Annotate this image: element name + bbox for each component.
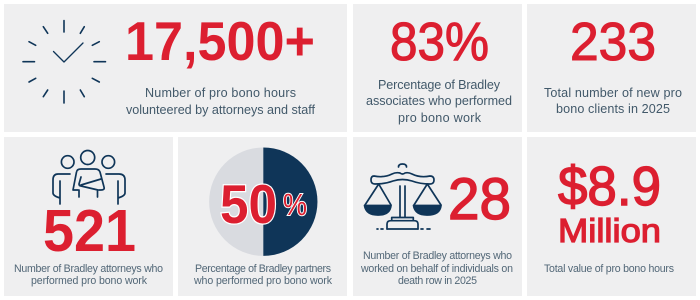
panel: new clients	[527, 4, 696, 132]
panel: associates percentage	[353, 4, 522, 132]
icon: clock	[23, 20, 106, 103]
chart: half pie	[209, 148, 317, 256]
description: pro bono hours: Number of pro bono hours	[145, 86, 296, 100]
panel: attorneys count	[4, 137, 173, 296]
statistic: 28: 28	[448, 167, 511, 232]
description: associates: pro bono work	[398, 111, 482, 125]
panel: total value	[527, 137, 696, 296]
statistic: 83%: 83%	[390, 12, 489, 72]
description: attorneys: Number of Bradley attorneys who	[14, 263, 163, 275]
description: total value: Total value of pro bono hours	[544, 263, 674, 275]
statistic: 521: 521	[43, 198, 136, 264]
description: associates: Percentage of Bradley	[378, 78, 501, 92]
statistic: $8.9 Million: $8.9	[558, 155, 661, 217]
description: partners: Percentage of Bradley partners	[195, 263, 331, 275]
panel: partners percentage	[178, 137, 347, 296]
statistic: $8.9 Million	[558, 155, 661, 249]
description: death row: worked on behalf of individuals on	[360, 263, 513, 275]
description: new clients: Total number of new pro	[544, 86, 682, 100]
statistic: 50%: %	[283, 187, 307, 222]
description: pro bono hours: volunteered by attorneys and staff	[126, 103, 316, 117]
description: partners: who performed pro bono work	[193, 275, 333, 287]
statistic: 17,500+: 17,500+	[125, 10, 315, 72]
panel: pro bono hours	[4, 4, 347, 132]
statistic: 233: 233	[570, 12, 656, 72]
icon: scales of justice	[364, 164, 441, 229]
statistic: $8.9 Million: Million	[558, 212, 661, 249]
description: new clients: bono clients in 2025	[556, 102, 670, 116]
description: death row: death row in 2025	[398, 275, 477, 287]
description: death row: Number of Bradley attorneys who	[363, 250, 512, 262]
description: attorneys: performed pro bono work	[31, 275, 148, 287]
statistic: 50%: 50	[220, 173, 277, 235]
description: associates: associates who performed	[366, 94, 512, 108]
icon: group of people	[53, 150, 125, 204]
panel: death row attorneys	[353, 137, 522, 296]
